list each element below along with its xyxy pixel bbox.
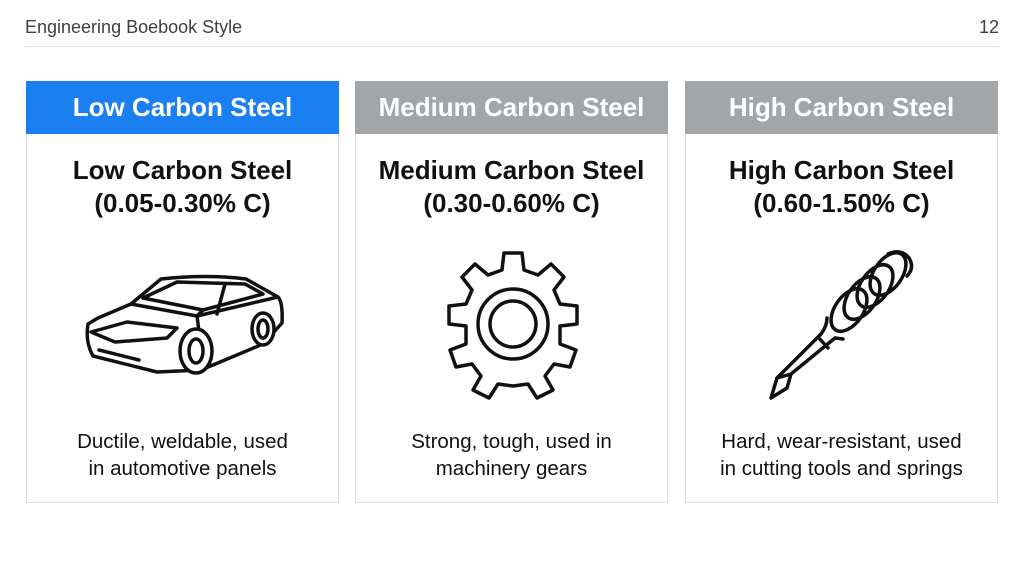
description: low (77, 430, 288, 480)
title: high: (0.60-1.50% C) (753, 188, 930, 218)
panel: medium carbon steel (355, 81, 668, 503)
title: low: Low Carbon Steel (73, 155, 292, 185)
description: medium (411, 430, 612, 480)
title: high: High Carbon Steel (729, 155, 954, 185)
icon: gear (447, 251, 579, 400)
title: medium: Medium Carbon Steel (379, 155, 644, 185)
icon: car (85, 274, 284, 375)
description: low: Ductile, weldable, used (77, 430, 288, 453)
description: high: in cutting tools and springs (720, 457, 963, 480)
panel header: high (685, 81, 998, 134)
panel header: medium (355, 81, 668, 134)
title: low (73, 155, 292, 218)
description: medium: Strong, tough, used in (411, 430, 612, 453)
description: high: Hard, wear-resistant, used (721, 430, 962, 453)
panel: low carbon steel (26, 81, 339, 503)
panel header: low: Low Carbon Steel (73, 92, 292, 122)
page number: 12 (979, 17, 999, 37)
panel header: high: High Carbon Steel (729, 92, 954, 122)
header title: Engineering Boebook Style (25, 17, 242, 37)
icon: spring tool (769, 250, 914, 400)
panel header: medium: Medium Carbon Steel (379, 92, 644, 122)
title: medium: (0.30-0.60% C) (423, 188, 600, 218)
panel: high carbon steel (685, 81, 998, 503)
title: low: (0.05-0.30% C) (94, 188, 271, 218)
description: high (720, 430, 963, 480)
panel header: low (26, 81, 339, 134)
description: medium: machinery gears (436, 457, 587, 480)
title: high (729, 155, 954, 218)
description: low: in automotive panels (88, 457, 277, 480)
title: medium (379, 155, 644, 218)
